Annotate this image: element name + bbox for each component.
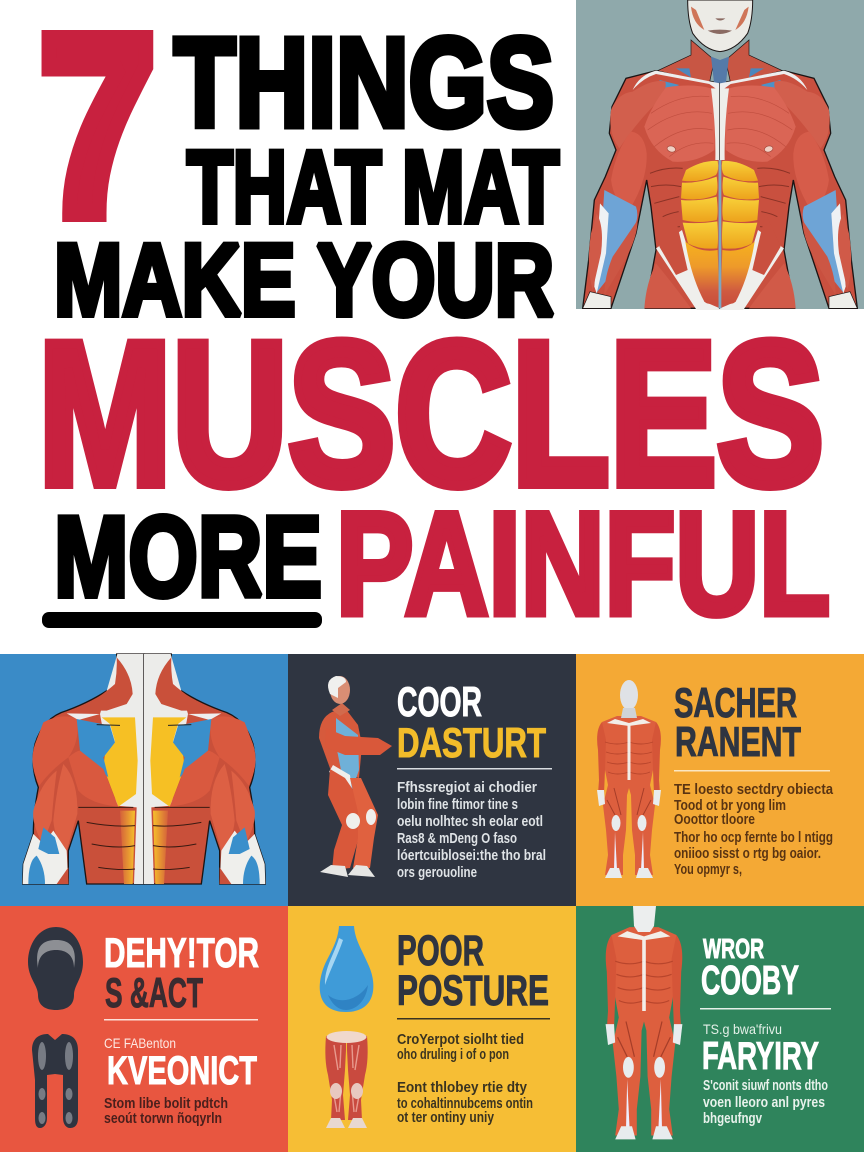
body text xyxy=(397,780,546,881)
body text: oelu nolhtec sh eolar eotl xyxy=(397,814,543,830)
divider xyxy=(397,1018,550,1020)
body text: Tood ot br yong lim xyxy=(674,798,786,814)
title underline xyxy=(42,612,322,628)
body text xyxy=(703,1078,828,1127)
heading xyxy=(397,927,549,1015)
panel: wror cooby xyxy=(576,906,864,1152)
body text: to cohaltinnubcems ontin xyxy=(397,1096,533,1112)
body text: voen lleoro anl pyres xyxy=(703,1095,825,1111)
icon: torso silhouette xyxy=(32,1034,78,1128)
icon: water drop xyxy=(320,926,373,1012)
heading: POOR xyxy=(397,927,484,975)
body text: ot ter ontiny uniy xyxy=(397,1110,494,1126)
divider xyxy=(397,768,552,770)
body text: ors gerouoline xyxy=(397,865,477,881)
title xyxy=(38,0,830,645)
standing muscle figure xyxy=(597,680,661,878)
body text: You opmyr s, xyxy=(674,862,742,878)
body text: seoút torwn ñoqyrln xyxy=(104,1111,222,1127)
divider xyxy=(700,1008,831,1010)
heading: COOBY xyxy=(701,957,799,1003)
heading xyxy=(104,929,259,1016)
heading: S &ACT xyxy=(105,969,203,1016)
body text: Ooottor tloore xyxy=(674,812,755,828)
title line: things: THINGS xyxy=(174,12,554,153)
panel: poor posture xyxy=(288,906,576,1152)
icon: head silhouette xyxy=(28,927,83,1010)
subheading: CE FABenton xyxy=(104,1035,176,1051)
heading: FARYIRY xyxy=(702,1035,819,1078)
muscular torso figure xyxy=(583,0,857,310)
standing muscle figure xyxy=(606,906,682,1139)
subheading: TS.g bwa'frivu xyxy=(703,1021,782,1037)
body text: oniioo sisst o rtg bg oaior. xyxy=(674,846,821,862)
body text xyxy=(104,1096,228,1127)
body text: Stom libe bolit pdtch xyxy=(104,1096,228,1112)
heading: DEHY!TOR xyxy=(104,929,259,976)
body text: bhgeufngv xyxy=(703,1111,762,1127)
body text: CroYerpot siolht tied xyxy=(397,1032,524,1048)
body text: TE loesto sectdry obiecta xyxy=(674,782,834,798)
heading: WROR xyxy=(703,933,764,964)
heading: COOR xyxy=(397,678,482,725)
body text xyxy=(397,1032,533,1126)
heading xyxy=(701,933,819,1078)
icon: legs xyxy=(325,1031,368,1128)
title line: that mat: THAT MAT xyxy=(187,130,559,244)
panel: shoulders and chest xyxy=(0,654,288,906)
secondary heading: KVEONICT xyxy=(107,1049,257,1093)
body text: Ffhssregiot ai chodier xyxy=(397,780,537,796)
heading: SACHER xyxy=(674,679,797,726)
panel: coor dasturt xyxy=(288,654,576,906)
body text: Eont thlobey rtie dty xyxy=(397,1080,527,1096)
side-view standing figure xyxy=(319,676,392,877)
divider xyxy=(674,770,830,772)
panel: dehydration xyxy=(0,906,288,1152)
title line: make your: MAKE YOUR xyxy=(54,223,554,337)
back and shoulder muscle figure xyxy=(23,654,265,884)
heading: POSTURE xyxy=(397,967,549,1015)
heading: RANENT xyxy=(675,718,801,765)
heading xyxy=(397,678,546,766)
body text: oho druling i of o pon xyxy=(397,1047,509,1063)
body text xyxy=(674,782,834,878)
title line: more: MORE xyxy=(54,494,322,621)
body text: Ras8 & mDeng O faso xyxy=(397,831,517,847)
heading: DASTURT xyxy=(397,719,546,766)
body text: lóertcuiblosei:the tho bral xyxy=(397,848,546,864)
body text: lobin fine ftimor tine s xyxy=(397,797,518,813)
panel: top anatomy illustration xyxy=(576,0,864,310)
heading xyxy=(674,679,801,765)
panel: sacher ranent xyxy=(576,654,864,906)
divider xyxy=(104,1019,258,1020)
